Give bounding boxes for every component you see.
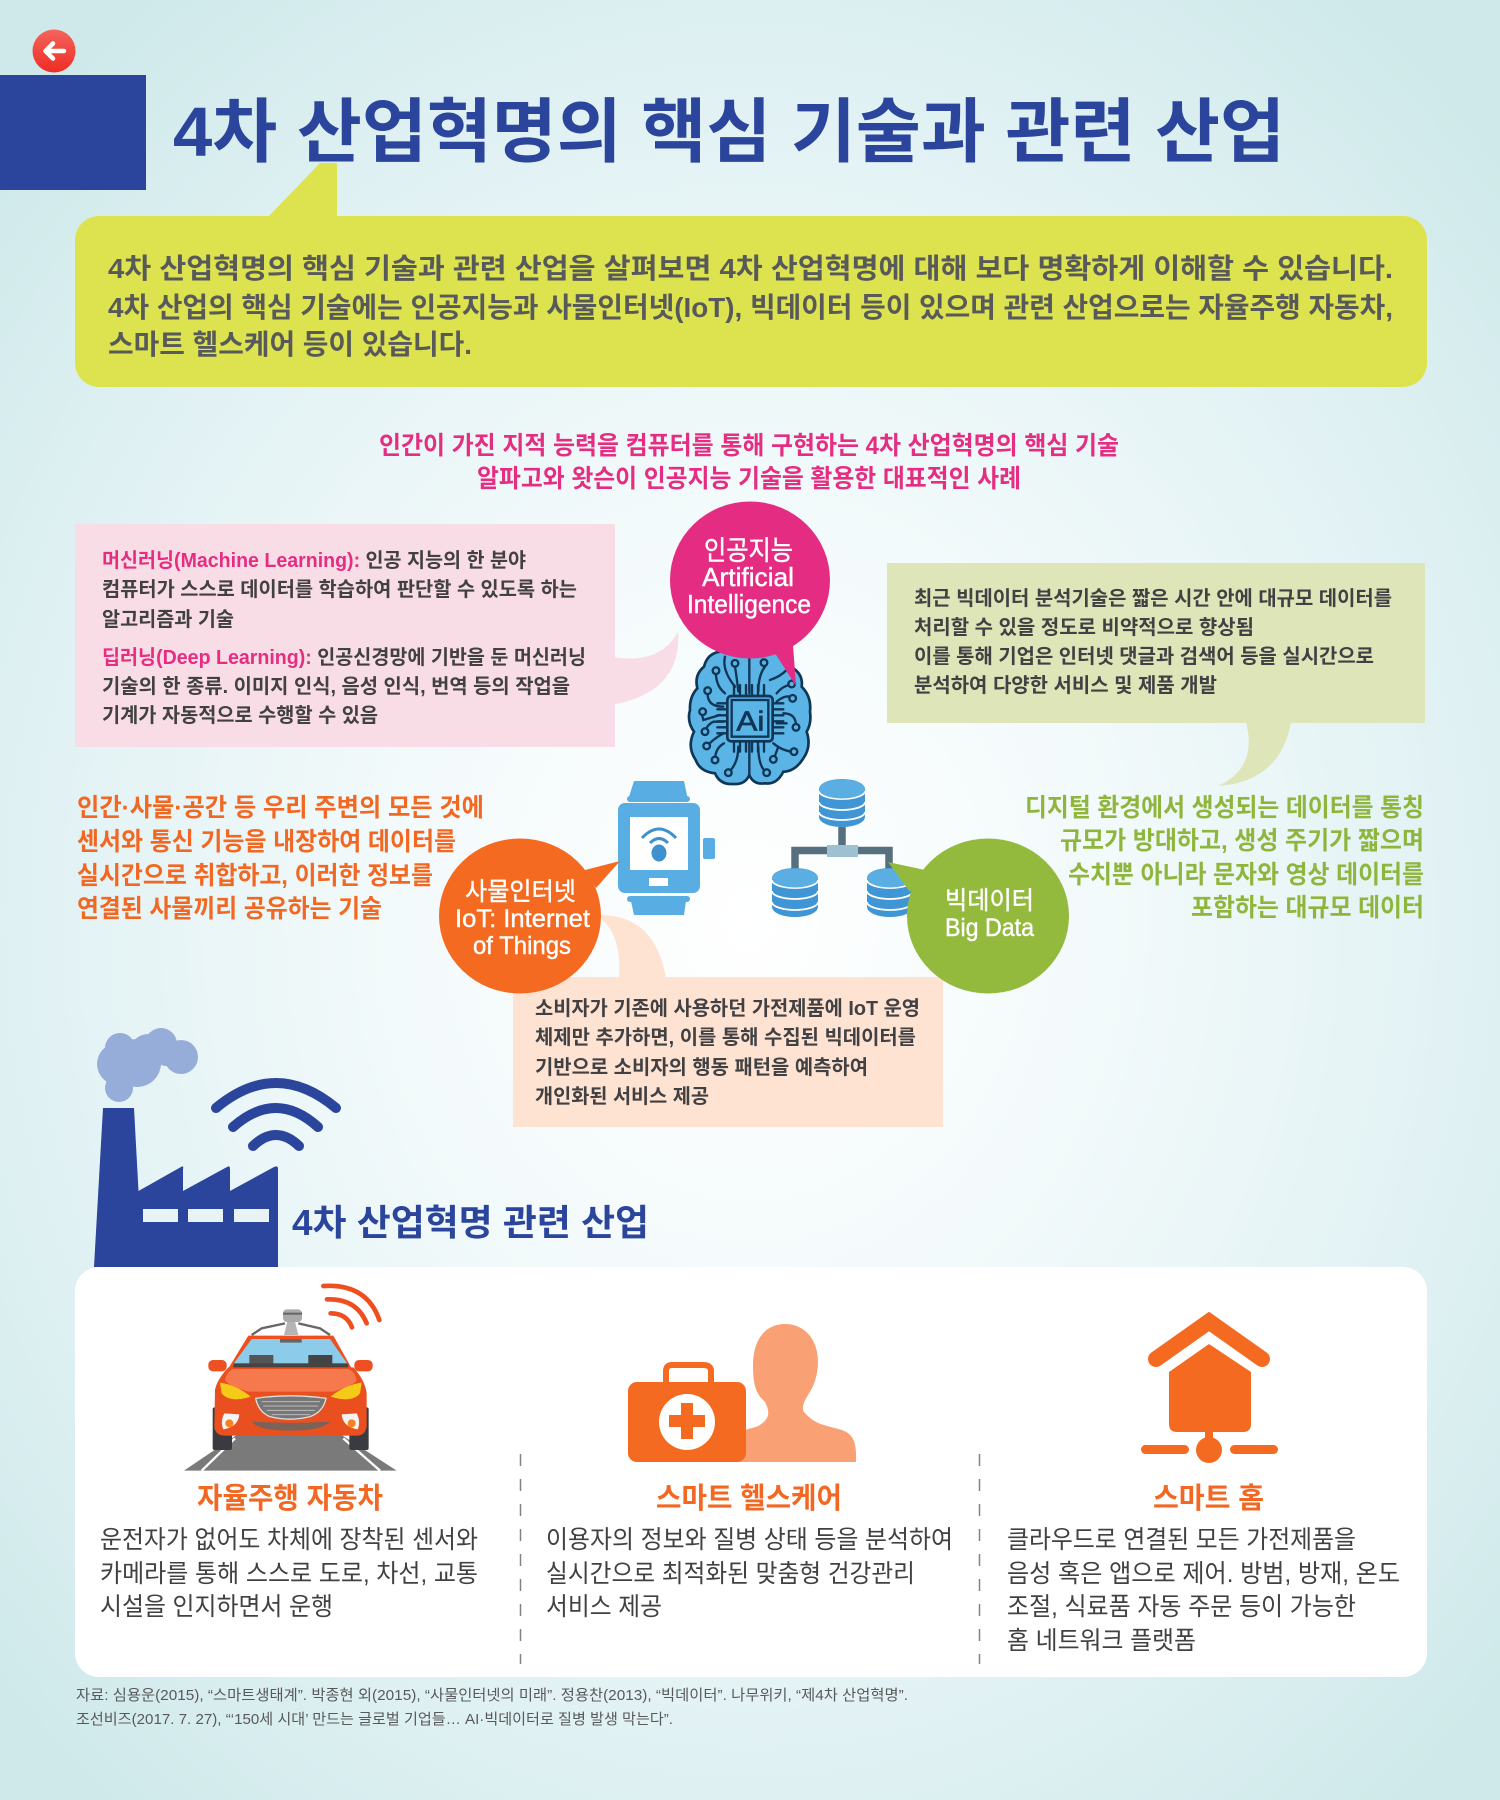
bubble text: Artificial — [702, 562, 794, 592]
machine learning text: 기계가 자동적으로 수행할 수 있음 — [102, 704, 378, 727]
icon: smart healthcare — [628, 1324, 856, 1462]
source note: 조선비즈(2017. 7. 27), “‘150세 시대’ 만드는 글로벌 기업들… AI·빅데이터로 질병 발생 막는다”. — [76, 1711, 673, 1728]
description — [546, 1526, 953, 1621]
icon: back button — [32, 30, 76, 72]
introduction text — [108, 253, 1393, 360]
description: 클라우드로 연결된 모든 가전제품을 — [1007, 1526, 1356, 1554]
description: 카메라를 통해 스스로 도로, 차선, 교통 — [100, 1560, 478, 1588]
description: 이용자의 정보와 질병 상태 등을 분석하여 — [546, 1526, 953, 1554]
IoT definition: 센서와 통신 기능을 내장하여 데이터를 — [77, 828, 456, 856]
machine learning text: 머신러닝(Machine Learning): 인공 지능의 한 분야 — [102, 549, 526, 572]
title: 4차 산업혁명의 핵심 기술과 관련 산업 — [173, 93, 1285, 171]
description: 홈 네트워크 플랫폼 — [1007, 1627, 1196, 1655]
IoT definition — [77, 794, 484, 923]
big data definition — [1025, 794, 1424, 922]
big data text: 처리할 수 있을 정도로 비약적으로 향상됨 — [914, 616, 1254, 639]
IoT service text: 소비자가 기존에 사용하던 가전제품에 IoT 운영 — [535, 997, 920, 1020]
description: 운전자가 없어도 차체에 장착된 센서와 — [100, 1526, 478, 1554]
introduction text: 스마트 헬스케어 등이 있습니다. — [108, 329, 472, 360]
bubble text — [687, 536, 811, 619]
industry: autonomous cars: 자율주행 자동차 — [197, 1482, 383, 1515]
divider lines — [520, 1454, 980, 1664]
bubble text: 인공지능 — [704, 536, 793, 566]
big data text: 이를 통해 기업은 인터넷 댓글과 검색어 등을 실시간으로 — [914, 645, 1374, 668]
icon: AI brain — [689, 650, 810, 784]
icon: smart watch — [618, 781, 715, 915]
AI definition heading — [379, 432, 1119, 493]
icon: autonomous car — [184, 1286, 397, 1471]
AI definition heading: 알파고와 왓슨이 인공지능 기술을 활용한 대표적인 사례 — [477, 465, 1021, 493]
panel: machine learning and deep learning — [75, 524, 678, 747]
introduction text: 4차 산업혁명의 핵심 기술과 관련 산업을 살펴보면 4차 산업혁명에 대해 보다 명확하게 이해할 수 있습니다. — [108, 253, 1393, 284]
IoT definition: 연결된 사물끼리 공유하는 기술 — [77, 895, 382, 923]
big data text: 최근 빅데이터 분석기술은 짧은 시간 안에 대규모 데이터를 — [914, 587, 1392, 610]
big data definition: 디지털 환경에서 생성되는 데이터를 통칭 — [1025, 794, 1424, 822]
bubble text: Intelligence — [687, 589, 811, 619]
label: Internet of Things bubble — [439, 838, 620, 994]
label: Big Data bubble — [888, 838, 1069, 994]
section heading: 4차 산업혁명 관련 산업 — [292, 1202, 649, 1243]
introduction text: 4차 산업의 핵심 기술에는 인공지능과 사물인터넷(IoT), 빅데이터 등이 있으며 관련 산업으로는 자율주행 자동차, — [108, 292, 1393, 323]
bubble text: Big Data — [945, 914, 1034, 942]
IoT definition: 인간·사물·공간 등 우리 주변의 모든 것에 — [77, 794, 484, 822]
description — [100, 1526, 478, 1621]
big data definition: 포함하는 대규모 데이터 — [1191, 894, 1424, 922]
industry: smart home: 스마트 홈 — [1153, 1482, 1264, 1515]
icon: AI brain: Ai — [736, 706, 764, 737]
icon: smart home — [1141, 1322, 1278, 1463]
bubble text — [945, 887, 1034, 942]
machine learning text — [102, 549, 586, 727]
industry: smart healthcare: 스마트 헬스케어 — [656, 1482, 842, 1515]
bubble text: IoT: Internet — [455, 905, 590, 933]
panel: introduction callout — [75, 216, 1427, 387]
big data text: 분석하여 다양한 서비스 및 제품 개발 — [914, 674, 1217, 697]
icon: smart factory — [94, 1028, 336, 1267]
description: 서비스 제공 — [546, 1593, 662, 1621]
industry: autonomous cars — [100, 1482, 478, 1621]
machine learning text: 알고리즘과 기술 — [102, 608, 234, 631]
bubble text: of Things — [473, 932, 571, 960]
description: 실시간으로 최적화된 맞춤형 건강관리 — [546, 1560, 915, 1588]
IoT definition: 실시간으로 취합하고, 이러한 정보를 — [77, 862, 433, 890]
big data definition: 규모가 방대하고, 생성 주기가 짧으며 — [1060, 827, 1424, 855]
machine learning text: 기술의 한 종류. 이미지 인식, 음성 인식, 번역 등의 작업을 — [102, 675, 570, 698]
IoT service text: 개인화된 서비스 제공 — [535, 1085, 709, 1108]
source note: 자료: 심용운(2015), “스마트생태계”. 박종현 외(2015), “사물인터넷의 미래”. 정용찬(2013), “빅데이터”. 나무위키, “제4차 산업혁명”. — [76, 1687, 908, 1704]
panel: related industries — [75, 1267, 1427, 1677]
AI definition heading: 인간이 가진 지적 능력을 컴퓨터를 통해 구현하는 4차 산업혁명의 핵심 기술 — [379, 432, 1119, 460]
label: Artificial Intelligence bubble — [670, 502, 830, 686]
description: 조절, 식료품 자동 주문 등이 가능한 — [1007, 1593, 1356, 1621]
machine learning text: 딥러닝(Deep Learning): 인공신경망에 기반을 둔 머신러닝 — [102, 646, 586, 669]
big data text — [914, 587, 1392, 697]
callout tail — [268, 163, 337, 217]
panel: big data technology — [887, 563, 1425, 786]
bubble text: 사물인터넷 — [465, 878, 576, 906]
icon: database network — [772, 779, 913, 917]
machine learning text: 컴퓨터가 스스로 데이터를 학습하여 판단할 수 있도록 하는 — [102, 578, 577, 601]
description — [1007, 1526, 1400, 1655]
description: 음성 혹은 앱으로 제어. 방범, 방재, 온도 — [1007, 1560, 1400, 1588]
big data definition: 수치뿐 아니라 문자와 영상 데이터를 — [1068, 861, 1424, 889]
industry: smart home — [1007, 1482, 1400, 1655]
industry: smart healthcare — [546, 1482, 953, 1621]
bubble text: 빅데이터 — [945, 887, 1034, 915]
bubble text — [455, 878, 590, 960]
IoT service text: 체제만 추가하면, 이를 통해 수집된 빅데이터를 — [535, 1026, 916, 1049]
source note — [76, 1687, 908, 1728]
title block marker — [0, 75, 146, 190]
description: 시설을 인지하면서 운행 — [100, 1593, 333, 1621]
panel: IoT service — [513, 915, 943, 1127]
IoT service text: 기반으로 소비자의 행동 패턴을 예측하여 — [535, 1056, 868, 1079]
IoT service text — [535, 997, 920, 1108]
